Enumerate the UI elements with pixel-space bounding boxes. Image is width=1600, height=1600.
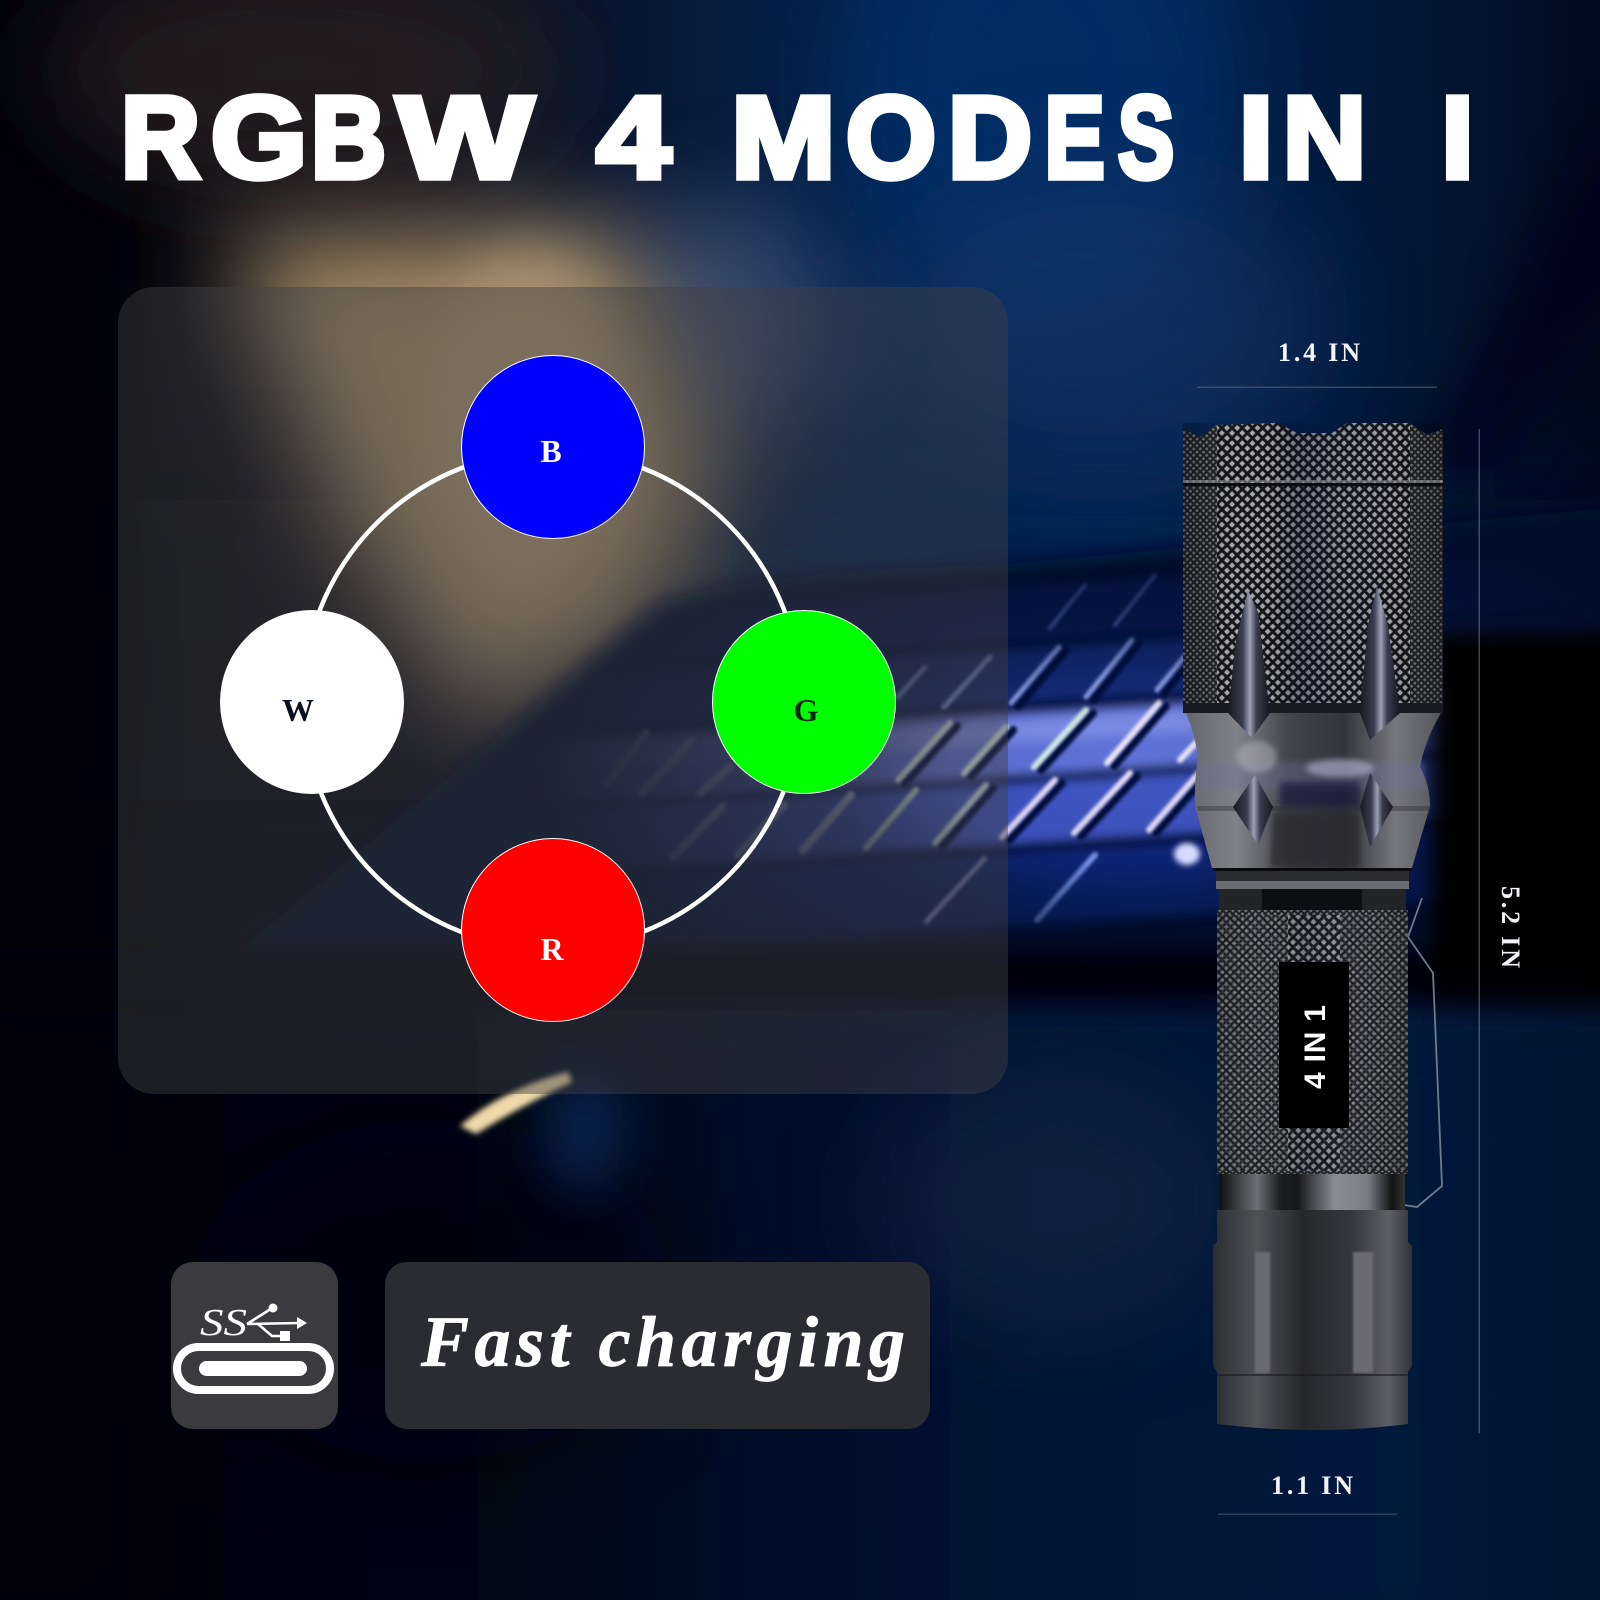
mode: green	[712, 610, 896, 794]
icon tile: USB-C SuperSpeed: SS	[200, 1302, 247, 1344]
mode: blue	[462, 356, 644, 538]
ring connecting modes	[303, 451, 801, 949]
dimension: length: 5.2 IN	[1496, 886, 1525, 968]
mode: blue: B	[540, 433, 562, 469]
mode: white	[220, 610, 404, 794]
feature label: fast charging	[385, 1262, 930, 1429]
feature label: fast charging: Fast charging	[420, 1302, 905, 1382]
title: B	[311, 72, 386, 202]
mode: red	[462, 838, 644, 1022]
title: 4	[597, 72, 671, 202]
flashlight: label: 4 IN 1	[1299, 1005, 1332, 1089]
title: I	[1442, 72, 1474, 202]
flashlight	[1183, 423, 1443, 1430]
mode: green: G	[794, 692, 819, 728]
title: W	[397, 72, 534, 202]
title: O	[846, 72, 936, 202]
title: D	[948, 72, 1032, 202]
title: E	[1045, 72, 1105, 202]
flashlight: head	[1183, 423, 1443, 868]
panel: colour modes	[118, 287, 1008, 1094]
title: R	[121, 72, 200, 202]
dimension: head width: 1.4 IN	[1278, 338, 1360, 367]
title: I	[1239, 72, 1273, 202]
flashlight: collar	[1213, 868, 1412, 910]
title: G	[211, 72, 307, 202]
flashlight: tail cap	[1213, 1210, 1412, 1430]
title: N	[1283, 72, 1366, 202]
title: M	[731, 72, 835, 202]
dimension: tail width: 1.1 IN	[1271, 1471, 1353, 1500]
flashlight: label	[1279, 962, 1349, 1128]
title: S	[1118, 72, 1174, 202]
flashlight: smooth ring	[1220, 1174, 1405, 1210]
icon tile: USB-C SuperSpeed	[171, 1262, 338, 1429]
flashlight: knurled body	[1217, 910, 1408, 1174]
mode: white: W	[282, 692, 314, 728]
mode: red: R	[540, 931, 564, 967]
flashlight: notches	[1228, 586, 1400, 847]
flashlight: pocket clip	[1404, 898, 1442, 1207]
